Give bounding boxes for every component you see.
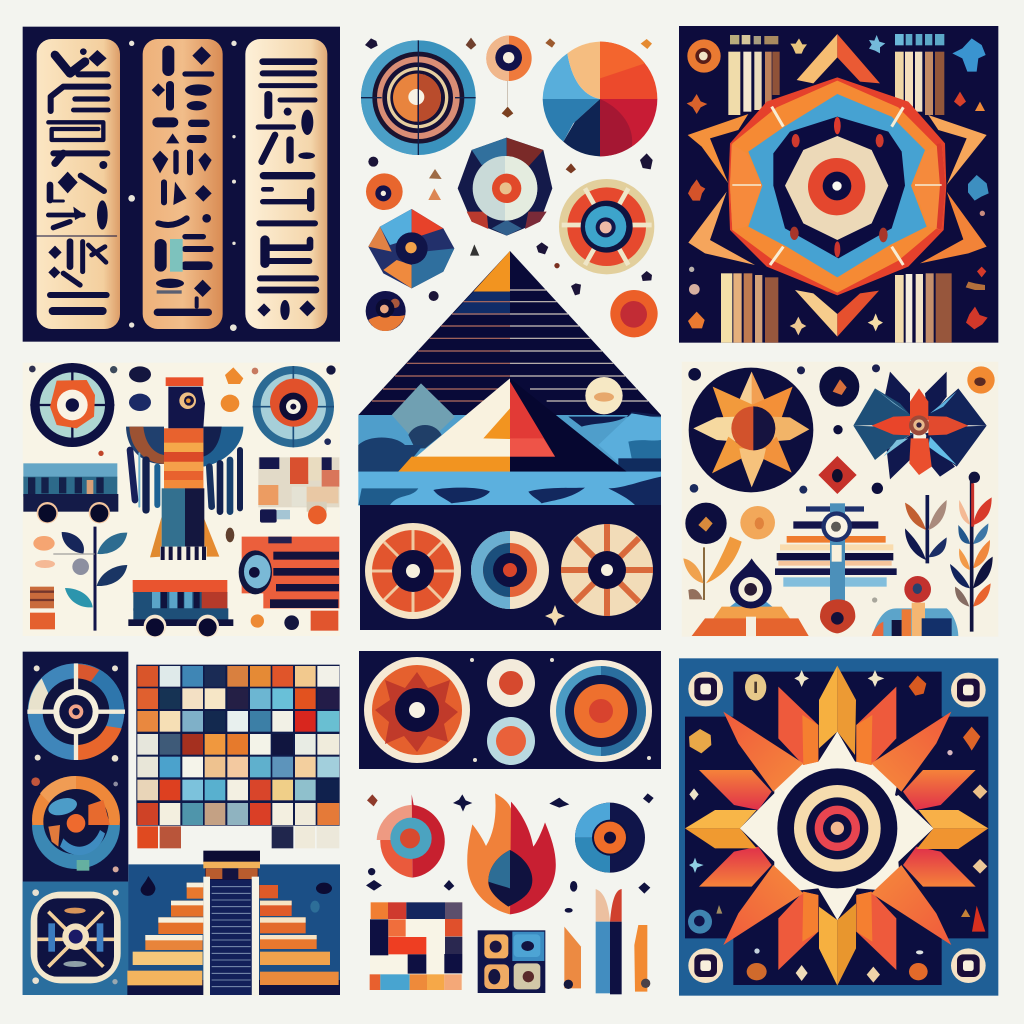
- medallion: blue concentric: [361, 40, 476, 155]
- target: red: [377, 794, 445, 878]
- panel: circles and medallions: [361, 36, 658, 337]
- medallion: orange small: [366, 173, 403, 210]
- striped blocks: [30, 587, 55, 629]
- four tiles: [478, 930, 545, 993]
- small circles left: [685, 503, 775, 544]
- gold points: [685, 666, 988, 986]
- striped fish: [239, 537, 339, 608]
- stepped temple: [127, 851, 340, 996]
- mosaic: [136, 665, 340, 848]
- plant: [33, 527, 127, 631]
- wheel: spoked square: [31, 892, 121, 983]
- medallion: small top: [487, 659, 535, 707]
- bird: [126, 377, 243, 560]
- sparkle: [545, 605, 565, 626]
- corner rings: [688, 672, 986, 983]
- sparkles: [470, 658, 651, 762]
- white star tips: [740, 732, 933, 920]
- medallion: ring with blue core: [559, 179, 654, 274]
- flame: [467, 793, 556, 914]
- base: blue: [23, 864, 340, 995]
- band: circles: [360, 505, 661, 630]
- panel: hieroglyph tablets: [23, 27, 340, 342]
- scattered marks: [366, 793, 654, 913]
- wheel: orange-blue: [32, 776, 120, 871]
- panel: medallions, mosaic and stepped temple: [23, 652, 340, 996]
- scattered marks: [365, 38, 653, 301]
- tablet: left: [37, 39, 120, 329]
- pyramid: striped: [358, 251, 661, 506]
- small dots: [128, 41, 237, 331]
- panel: bird, buses and plants: [23, 363, 340, 637]
- sun medallion: [689, 368, 813, 492]
- feathers right: [950, 472, 993, 632]
- panel: radiant star: [679, 658, 998, 996]
- white star base: [740, 732, 933, 920]
- red eye diamond: [818, 456, 857, 494]
- navy field: [685, 672, 988, 985]
- target: blue: [575, 803, 645, 873]
- orange disc: [610, 290, 658, 337]
- star flower: [853, 372, 987, 479]
- column: navy: [23, 652, 128, 882]
- panel: pyramid scene: [358, 251, 661, 630]
- petals: [699, 687, 976, 970]
- centre eye: [785, 136, 888, 240]
- medallion: faceted polygon: [368, 209, 454, 288]
- tablet: right: [245, 39, 327, 329]
- panel: flame and blocks: [366, 793, 654, 994]
- river: [358, 472, 661, 506]
- panel: flowers, feathers and totems: [682, 362, 998, 637]
- totem: [775, 503, 897, 633]
- medallion: dark polygon: [458, 138, 552, 236]
- target: navy ring: [30, 363, 114, 447]
- navy dots: [688, 364, 995, 494]
- centre rings: [777, 768, 897, 888]
- wheel: right: [561, 524, 653, 616]
- wheel: crosshair: [27, 663, 125, 760]
- bus: top: [23, 463, 118, 523]
- pixel spiral: [370, 902, 463, 990]
- outer star points: [688, 34, 987, 337]
- wheel: left: [365, 523, 461, 619]
- panel: medallion strip: [359, 651, 661, 769]
- hills and water: [358, 415, 661, 472]
- patchwork: [258, 457, 339, 524]
- folded rings: [728, 77, 946, 295]
- pie wheel: [543, 42, 657, 156]
- inner pyramid: [398, 378, 510, 472]
- feathers left: [905, 495, 947, 563]
- small ornaments: [688, 670, 987, 983]
- pyramid with eye: [692, 558, 809, 636]
- target: blue ring: [253, 366, 334, 447]
- wheel: middle: [471, 531, 549, 609]
- panel: folded star: [679, 26, 998, 343]
- striped bars: [721, 34, 952, 343]
- medallion: dark swirl: [366, 291, 406, 331]
- figure with red head: [872, 576, 958, 636]
- tablet: middle: [143, 39, 223, 329]
- dots: [31, 665, 119, 984]
- medallion: right: [550, 660, 652, 762]
- bus: bottom: [128, 580, 233, 637]
- corner ornaments: [687, 35, 989, 335]
- bars: [564, 889, 650, 994]
- medallion: small bottom: [487, 717, 535, 765]
- medallion: left: [364, 657, 470, 763]
- small shapes: [29, 365, 338, 631]
- medallion: small orange eye: [486, 36, 532, 118]
- plant: orange: [683, 537, 742, 600]
